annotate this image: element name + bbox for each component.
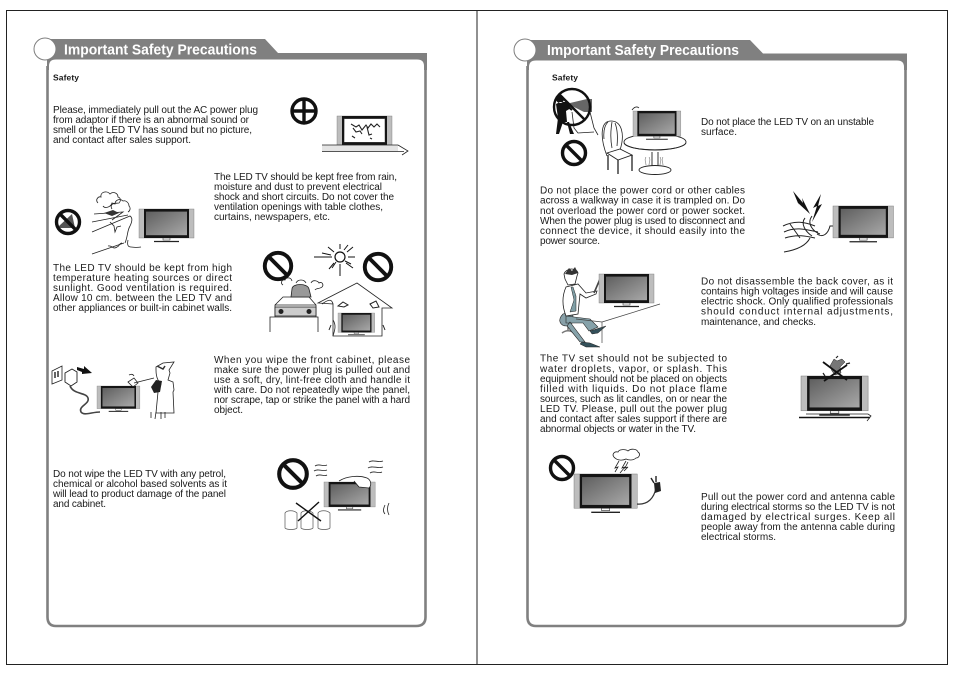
text: water and flame warning: LED TV. Please, pull out the power plug — [540, 404, 727, 415]
text: power cord placement: Do not place the power cord or other cables — [540, 185, 745, 196]
text: solvents warning: Do not wipe the LED TV with any petrol, — [53, 469, 226, 480]
text: heat sources: temperature heating sources or direct — [53, 273, 232, 284]
text: abnormal sound — [53, 105, 258, 146]
text: keep free from rain: shock and short circuits. Do not cover the — [214, 192, 394, 203]
text: solvents warning: and cabinet. — [53, 499, 106, 510]
left panel header — [34, 38, 427, 70]
illustration: unplugging and wiping tv — [52, 362, 174, 419]
icon: plus sign — [292, 99, 316, 123]
text: abnormal sound: from adaptor if there is an abnormal sound or — [53, 115, 250, 126]
text: wiping front cabinet — [213, 355, 410, 416]
illustration: man opening tv back — [560, 267, 660, 347]
icon: prohibited unstable placement — [554, 89, 598, 135]
text: keep free from rain: moisture and dust to prevent electrical — [214, 182, 382, 193]
right panel header — [514, 39, 907, 70]
text: abnormal sound: Please, immediately pull out the AC power plug — [53, 105, 258, 116]
text: keep free from rain: The LED TV should be kept free from rain, — [214, 172, 397, 183]
text: power cord placement: connect the device, it should easily into the — [540, 226, 745, 237]
panel: right page — [514, 39, 907, 626]
illustration: house with tv — [318, 283, 392, 336]
right panel header: Important Safety Precautions — [547, 42, 739, 59]
text: solvents warning — [52, 469, 227, 510]
text: electrical storms: electrical storms. — [701, 532, 776, 543]
icon: prohibited sunlight — [365, 254, 391, 280]
illustration: tv with unplugged cord — [574, 474, 661, 512]
right panel border — [528, 66, 906, 626]
heading: safety: Safety — [53, 72, 79, 82]
text: unstable surface: Do not place the LED TV on an unstable — [701, 117, 874, 128]
illustration: tv — [833, 206, 894, 242]
illustration: tv on round table — [624, 107, 686, 174]
text: solvents warning: chemical or alcohol based solvents as it — [53, 479, 227, 490]
icon: prohibited storm — [550, 456, 574, 480]
text: keep free from rain: ventilation openings with table clothes, — [214, 202, 383, 213]
text: electrical storms: Pull out the power cord and antenna cable — [701, 492, 895, 503]
text: abnormal sound: smell or the LED TV has sound but no picture, — [53, 125, 252, 136]
illustration: sun — [314, 244, 355, 276]
text: unstable surface: surface. — [701, 127, 737, 138]
text: electrical storms: damaged by electrical surges. Keep all — [701, 512, 895, 523]
text: disassemble warning: maintenance, and checks. — [701, 317, 816, 328]
text: power cord placement: not overload the power cord or power socket. — [540, 206, 745, 217]
text: power cord placement: across a walkway in case it is trampled on. Do — [540, 196, 745, 206]
text: disassemble warning: contains high voltages inside and will cause — [701, 286, 893, 298]
left panel border — [48, 66, 426, 626]
text: water and flame warning: filled with liquids. Do not place flame — [540, 384, 727, 395]
text: heat sources — [53, 263, 232, 314]
text: wiping front cabinet: When you wipe the front cabinet, please — [214, 355, 410, 366]
illustration: tv with objects on top crossed out — [799, 356, 871, 421]
illustration: tv being opened — [599, 274, 654, 306]
text: wiping front cabinet: object. — [214, 405, 243, 416]
text: disassemble warning: should conduct internal adjustments, — [701, 306, 893, 318]
text: wiping front cabinet: with care. Do not repeatedly wipe the panel, — [213, 385, 410, 396]
text: power cord placement: When the power plug is used to disconnect and — [540, 216, 745, 227]
text: electrical storms — [701, 492, 895, 543]
text: water and flame warning: sources, such as lit candles, on or near the — [540, 394, 727, 405]
icon: prohibited heat — [265, 253, 291, 279]
text: disassemble warning: Do not disassemble the back cover, as it — [701, 276, 893, 287]
illustration: storm cloud with lightning — [613, 449, 639, 473]
text: electrical storms: during electrical storms so the LED TV is not — [701, 502, 895, 513]
text: unstable surface — [701, 117, 874, 138]
text: power cord placement: power source. — [540, 236, 600, 247]
text: keep free from rain — [214, 172, 397, 223]
text: water and flame warning: The TV set should not be subjected to — [540, 354, 727, 365]
text: wiping front cabinet: use a soft, dry, lint-free cloth and handle it — [214, 375, 410, 386]
illustration: chair — [602, 121, 632, 174]
text: keep free from rain: curtains, newspapers, etc. — [214, 212, 330, 223]
text: wiping front cabinet: make sure the power plug is pulled out and — [214, 365, 410, 376]
text: electrical storms: people away from the antenna cable during — [701, 522, 895, 533]
illustration: tv — [139, 209, 194, 242]
text: power cord placement — [540, 185, 745, 247]
illustration: steam and covered table — [92, 192, 141, 254]
text: solvents warning: will lead to product damage of the panel — [52, 489, 226, 500]
text: water and flame warning: equipment should not be placed on objects — [540, 374, 727, 385]
text: heat sources: other appliances or built-in cabinet walls. — [53, 303, 232, 314]
illustration: stove with kettle — [270, 278, 323, 332]
illustration: tv on shelf with noisy picture — [322, 116, 408, 155]
text: water and flame warning: water droplets, vapor, or splash. This — [539, 364, 727, 375]
left panel header: Important Safety Precautions — [64, 42, 257, 58]
heading: safety: Safety — [552, 73, 578, 83]
icon: no covering sign — [56, 210, 80, 234]
icon: prohibited solvents — [279, 460, 307, 488]
text: abnormal sound: and contact after sales support. — [53, 135, 191, 146]
text: heat sources: Allow 10 cm. between the LED TV and — [53, 293, 232, 304]
text: disassemble warning — [701, 276, 893, 328]
illustration: overloaded cords with sparks — [783, 191, 833, 252]
text: disassemble warning: electric shock. Only qualified professionals — [701, 296, 893, 308]
illustration: solvent wiping tv — [285, 461, 389, 530]
text: water and flame warning — [539, 354, 727, 435]
text: heat sources: sunlight. Good ventilation is required. — [53, 283, 232, 294]
text: heat sources: The LED TV should be kept from high — [53, 263, 232, 274]
text: wiping front cabinet: nor scrape, tap or strike the panel with a hard — [214, 395, 410, 406]
panel: left page — [34, 38, 427, 626]
text: water and flame warning: abnormal objects or water in the TV. — [540, 424, 696, 435]
icon: prohibited sign — [562, 142, 586, 164]
text: water and flame warning: and contact after sales support if there are — [540, 414, 727, 425]
